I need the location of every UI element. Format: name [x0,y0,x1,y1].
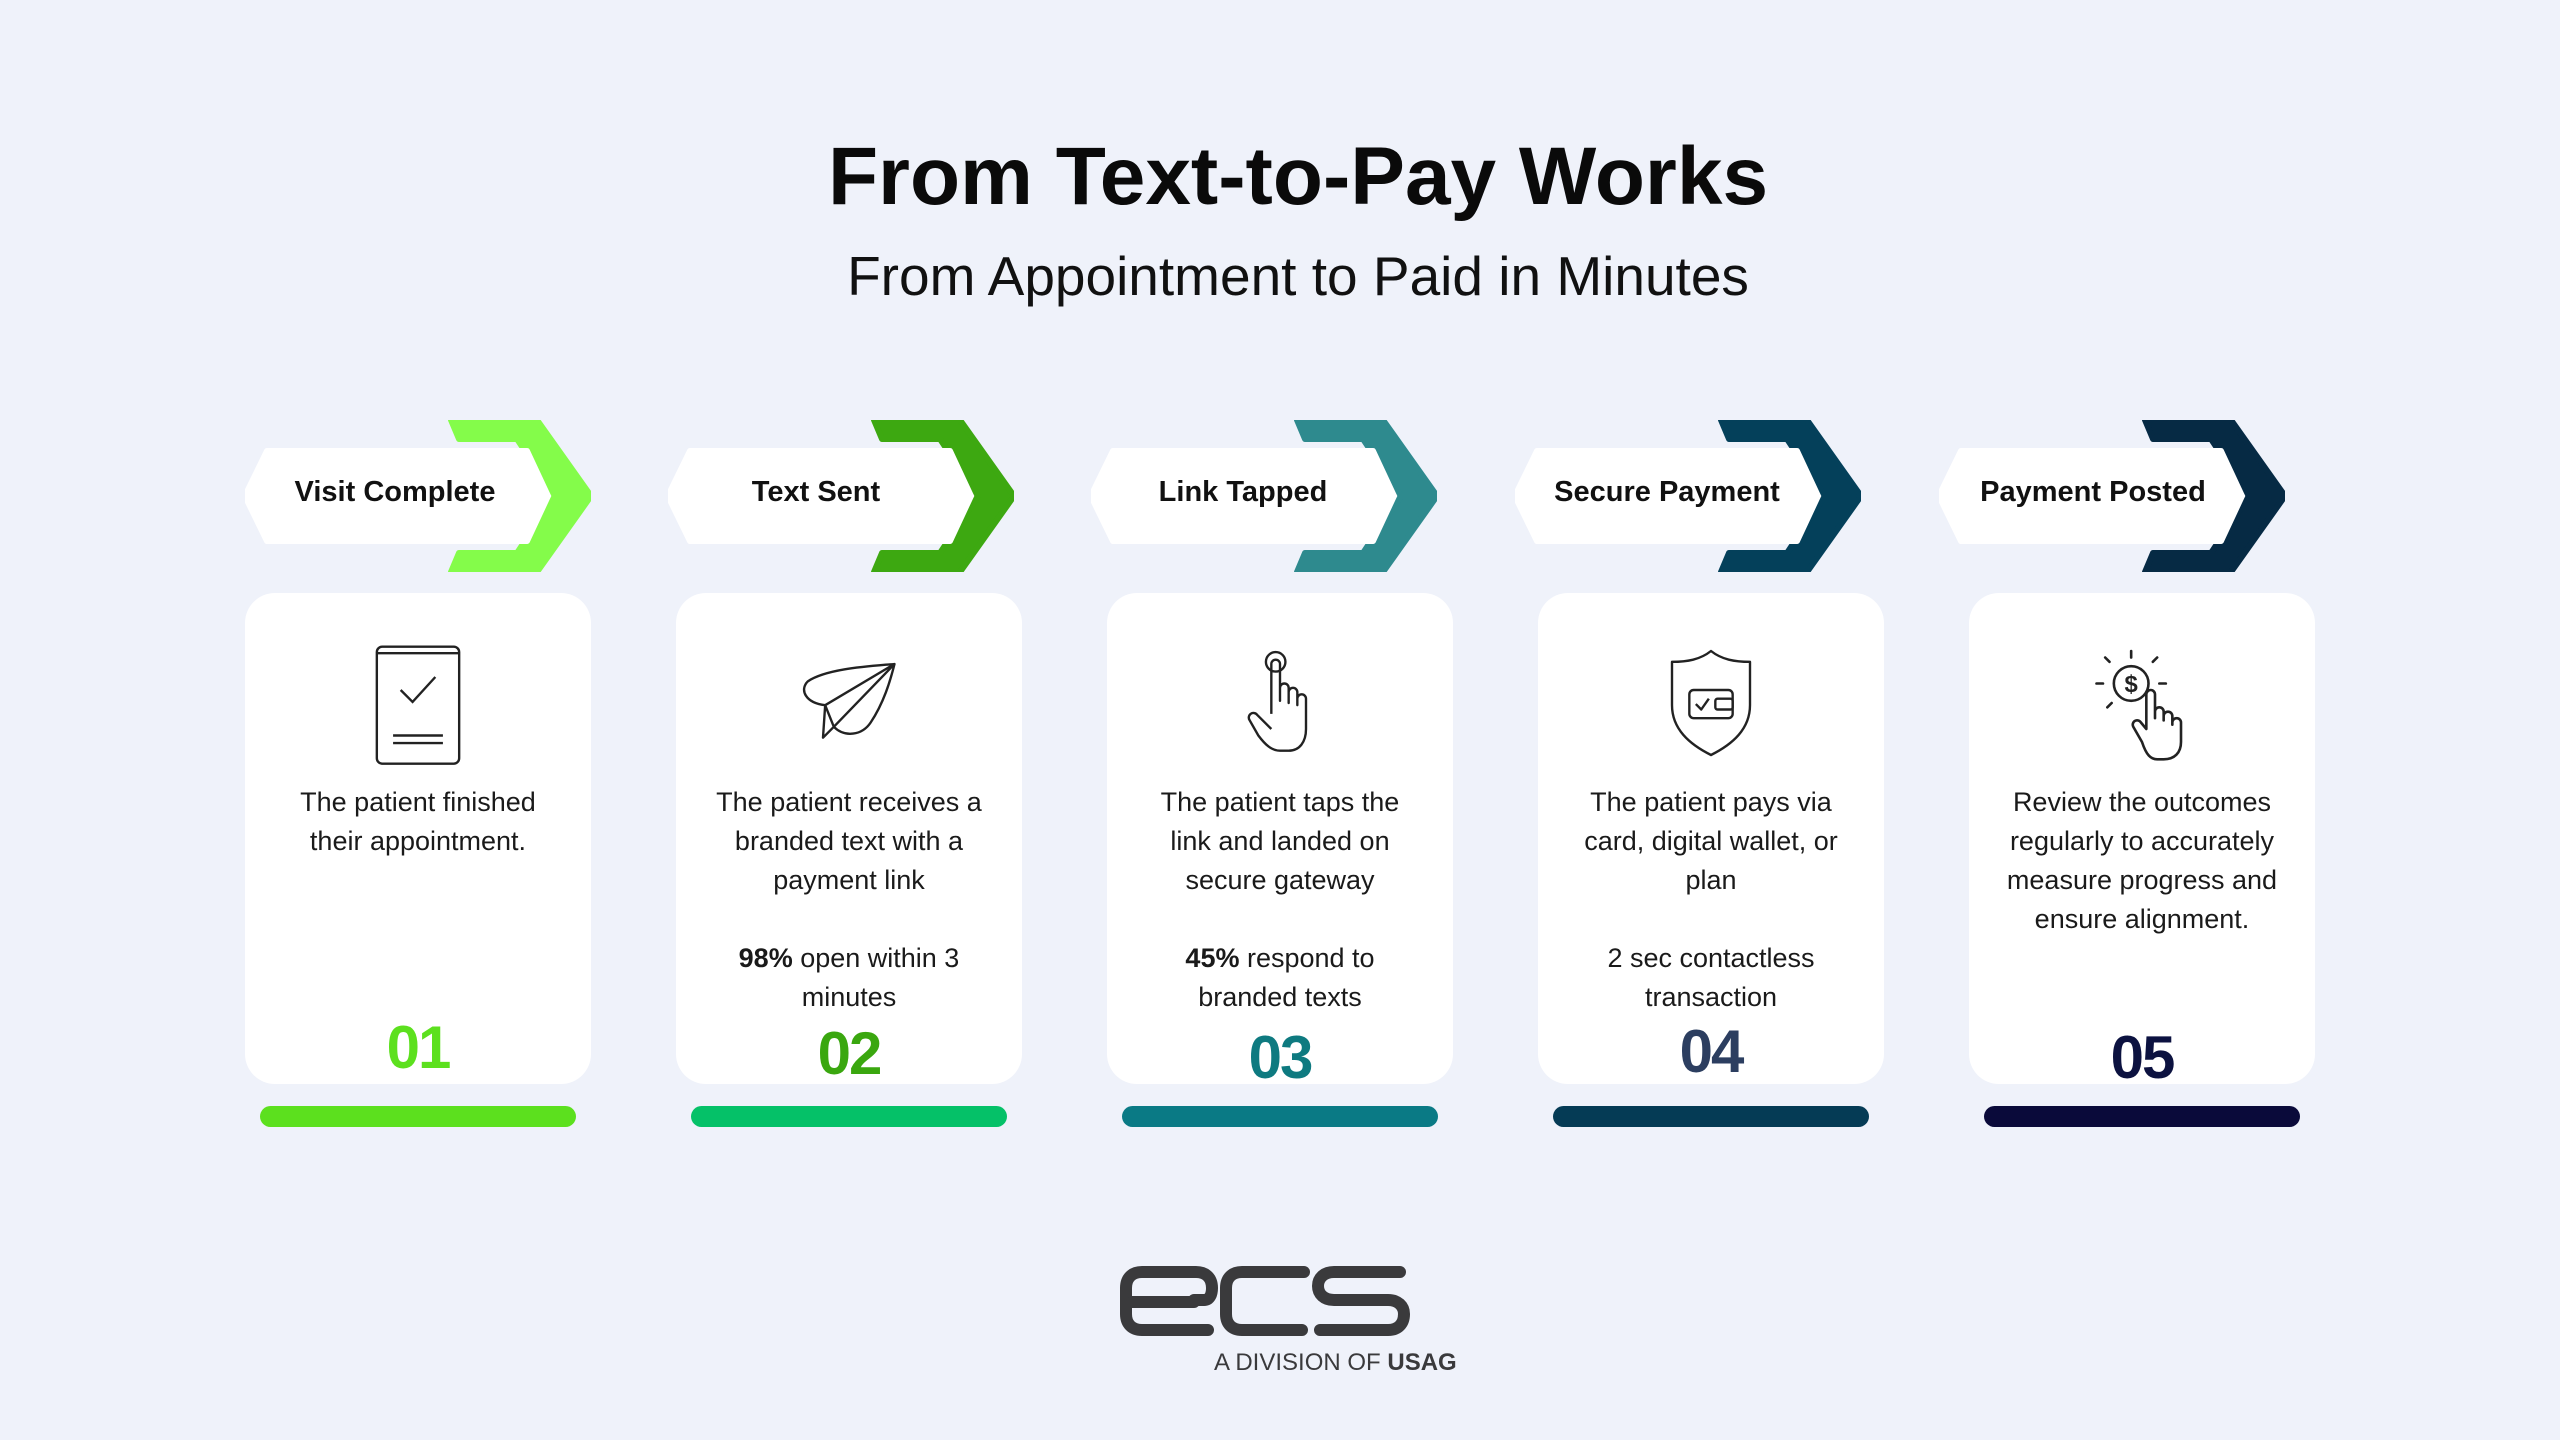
text: The patient receives a branded text with a payment link [716,787,982,895]
header chevron 5: Payment Posted [1980,476,2206,508]
step 4: Secure Payment [1515,420,1884,1127]
subtitle: From Appointment to Paid in Minutes [847,245,1749,307]
number: 03 [1249,1024,1311,1091]
icon: coin with hand: $ [2125,671,2138,698]
text: 2 sec contactless transaction [1607,943,1815,1012]
text: 98% open within 3 minutes [739,943,959,1012]
card 3 [1107,593,1453,1084]
header chevron 2: Text Sent [752,476,880,508]
number: 01 [387,1014,449,1081]
card 2 [676,593,1022,1084]
step 3: Link Tapped [1091,420,1453,1127]
header chevron 4 [1515,420,1861,572]
progress bar [1122,1106,1438,1127]
text: The patient finished their appointment. [300,787,536,856]
text: 45% respond to branded texts [1185,943,1375,1012]
progress bar [1553,1106,1869,1127]
card 4 [1538,593,1884,1084]
header chevron 3: Link Tapped [1159,476,1327,508]
logo tagline: A DIVISION OF USAG [1214,1349,1457,1376]
icon: coin with hand [2095,650,2182,761]
number: 02 [818,1020,880,1087]
number: 05 [2111,1024,2173,1091]
step 1: Visit Complete [245,420,591,1127]
header chevron 5 [1939,420,2285,572]
progress bar [691,1106,1007,1127]
icon: paper plane [802,662,896,739]
progress bar [260,1106,576,1127]
logo: ecs [1120,1266,1410,1336]
step 2: Text Sent [668,420,1022,1127]
text: Review the outcomes regularly to accurately measure progress and ensure alignment. [2007,787,2277,934]
title: From Text-to-Pay Works [828,131,1768,222]
card 5 [1969,593,2315,1084]
header chevron 4: Secure Payment [1554,476,1780,508]
icon: shield wallet [1670,650,1752,756]
card 1 [245,593,591,1084]
header chevron 2 [668,420,1014,572]
text [1584,787,1838,1012]
number: 04 [1680,1018,1742,1085]
icon: checklist tablet [376,646,460,765]
header chevron 3 [1091,420,1437,572]
header chevron 1: Visit Complete [295,476,495,508]
progress bar [1984,1106,2300,1127]
step 5: Payment Posted [1939,420,2315,1127]
text: The patient taps the link and landed on secure gateway [1161,787,1399,895]
header chevron 1 [245,420,591,572]
icon: tapping hand [1248,650,1308,752]
text [716,787,982,1012]
text [1161,787,1399,1012]
text: The patient pays via card, digital wallet, or plan [1584,787,1838,895]
